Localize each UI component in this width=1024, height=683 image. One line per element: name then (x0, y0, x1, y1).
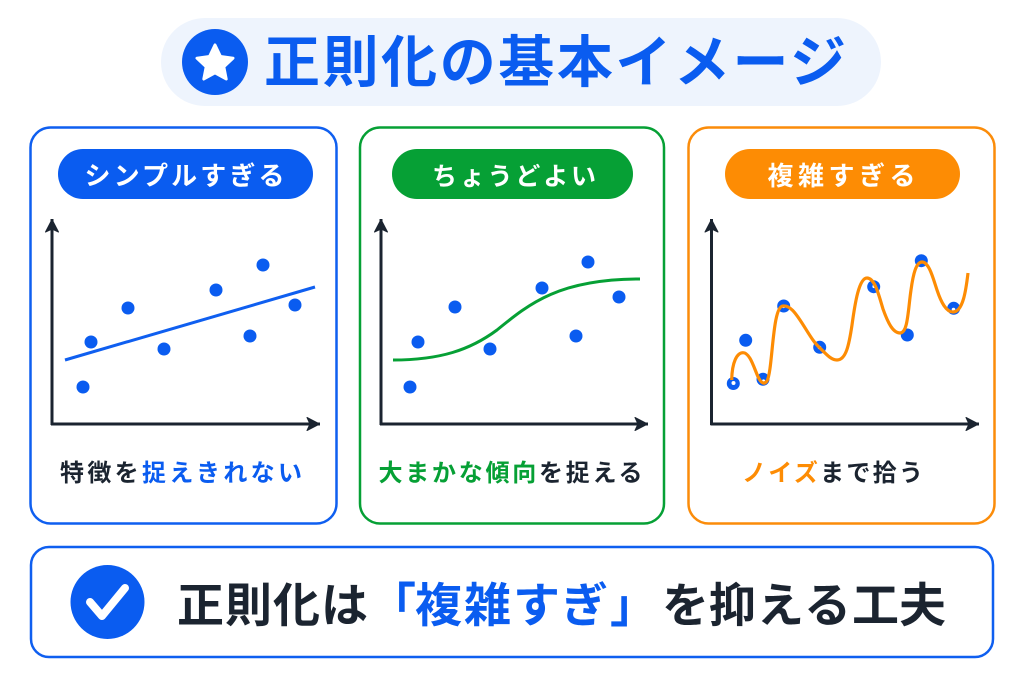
caption: simple: 特徴を捉えきれない (60, 460, 302, 487)
badge: complex (725, 149, 960, 199)
badge: simple: シンプルすぎる (84, 161, 284, 191)
panel: complex (688, 128, 994, 524)
conclusion panel (31, 547, 993, 657)
chart: overfit curve (710, 219, 979, 425)
caption: complex: ノイズまで拾う (742, 459, 923, 487)
badge: simple (58, 149, 313, 199)
chart: underfit line (51, 219, 320, 425)
title text: 正則化の基本イメージ (264, 31, 846, 94)
panel: just right (360, 128, 664, 524)
badge: complex: 複雑すぎる (768, 161, 916, 191)
icon: star badge (182, 29, 248, 95)
caption: just right: 大まかな傾向を捉える (378, 460, 642, 487)
panel: simple (30, 128, 336, 524)
chart: good fit curve (380, 219, 648, 425)
conclusion text: 「複雑すぎ」 (369, 579, 657, 632)
badge: just right (392, 149, 633, 199)
conclusion text: を抑える工夫 (662, 579, 946, 632)
conclusion text: 正則化は (177, 579, 368, 632)
badge: just right: ちょうどよい (432, 163, 596, 191)
title banner (161, 18, 881, 106)
icon: check badge (70, 565, 144, 639)
